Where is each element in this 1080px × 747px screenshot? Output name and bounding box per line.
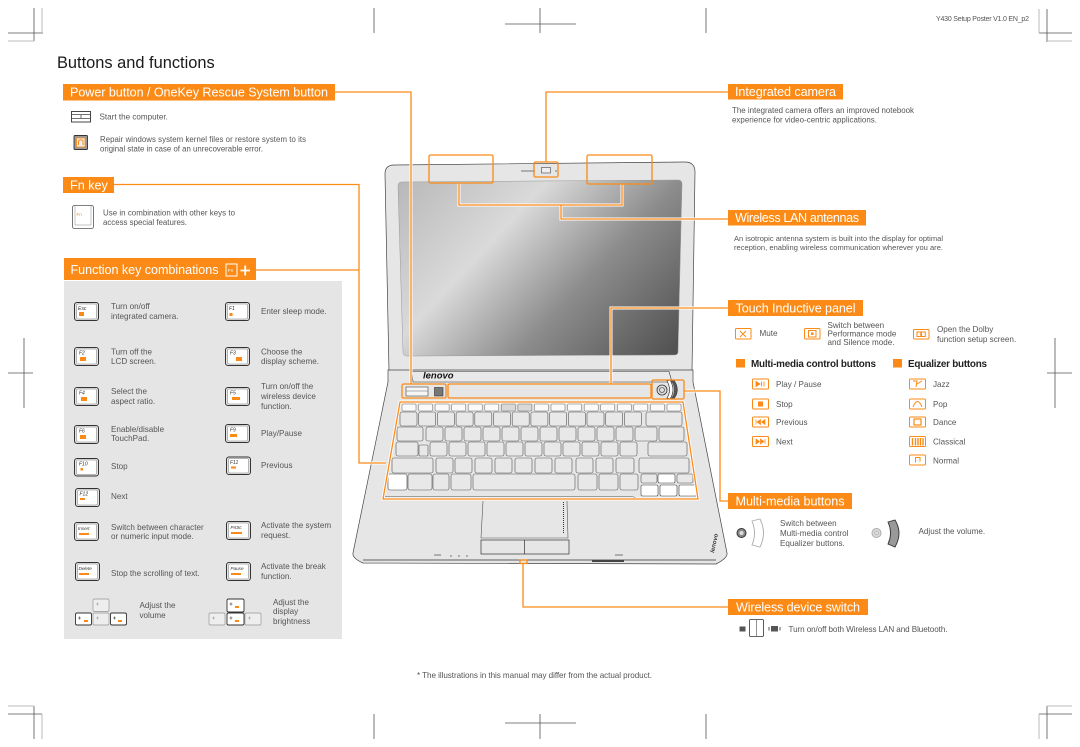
f2 key: LCD screen.	[111, 357, 156, 366]
integrated camera description	[732, 106, 914, 124]
equalizer buttons list	[893, 359, 988, 466]
brightness arrow keys: brightness	[273, 617, 310, 626]
classical: Classical	[933, 438, 966, 446]
next	[752, 436, 793, 446]
footnote: * The illustrations in this manual may differ from the actual product.	[417, 671, 652, 680]
f2 key: F2	[79, 350, 85, 356]
function key row	[402, 404, 681, 411]
stop	[752, 399, 793, 409]
icon: mute	[736, 328, 751, 339]
prtsc key: Activate the system	[261, 521, 331, 530]
bullet	[736, 359, 745, 368]
performance mode item: and Silence mode.	[828, 338, 895, 347]
pause key: function.	[261, 572, 292, 581]
performance mode item	[804, 321, 897, 347]
icon: power button	[72, 112, 90, 122]
camera lens and status lights	[521, 168, 557, 173]
power button description: Start the computer.	[100, 112, 168, 122]
mute item: Mute	[760, 329, 778, 338]
f1 key	[226, 302, 327, 320]
icon: performance mode	[804, 328, 820, 339]
f11 key	[226, 457, 292, 474]
f11 key: Previous	[261, 461, 292, 470]
delete key: Stop the scrolling of text.	[111, 569, 200, 578]
f2 key: Turn off the	[111, 348, 152, 356]
f4 key: F4	[79, 390, 85, 396]
f6 key: F6	[79, 428, 85, 434]
icon: on state	[769, 626, 780, 632]
icon: switch	[750, 620, 764, 636]
onekey button	[434, 388, 443, 396]
f3 key: Choose the	[261, 348, 303, 356]
wireless lan antennas description: An isotropic antenna system is built into the display for optimal	[734, 234, 943, 243]
power button	[406, 387, 428, 396]
front edge and ports: lenovo	[710, 533, 720, 553]
laptop illustration	[353, 162, 727, 564]
multi-media switch item	[737, 519, 849, 548]
delete key: Delete	[78, 566, 92, 571]
performance mode item: Performance mode	[828, 330, 897, 338]
bullet	[893, 359, 902, 368]
multi-media control buttons list: Multi-media control buttons	[751, 359, 876, 370]
previous	[752, 417, 808, 427]
previous: Previous	[776, 418, 808, 427]
prtsc key: request.	[261, 531, 290, 540]
brightness arrow keys: display	[273, 607, 299, 616]
fn key description: access special features.	[103, 218, 187, 227]
icon: volume wheel	[872, 520, 899, 547]
multi-media control buttons list	[736, 359, 876, 446]
multi-media switch item: Multi-media control	[780, 529, 849, 538]
volume arrow keys: volume	[140, 611, 166, 620]
laptop lid	[385, 162, 695, 372]
insert key: or numeric input mode.	[111, 532, 194, 541]
icon: fn key: Fn	[76, 212, 82, 217]
dance: Dance	[933, 418, 957, 427]
f10 key: F10	[79, 462, 88, 468]
integrated camera description: The integrated camera offers an improved notebook	[732, 106, 914, 115]
f9 key	[226, 424, 302, 442]
multi-media switch item: Switch between	[780, 519, 837, 528]
f1 key: F1	[229, 306, 235, 312]
brightness arrow keys	[209, 598, 310, 626]
f10 key: Stop	[111, 462, 128, 471]
insert key	[74, 522, 204, 541]
f9 key: F9	[230, 428, 236, 434]
f2 key	[74, 348, 156, 366]
pause key	[226, 562, 327, 581]
keyboard tray edge	[385, 496, 637, 499]
wireless switch item	[740, 620, 948, 636]
icon: off state	[740, 626, 746, 632]
equalizer buttons list: Equalizer buttons	[908, 359, 988, 370]
heading: function key combinations	[64, 258, 256, 280]
delete key	[76, 562, 200, 580]
f12 key	[76, 488, 128, 506]
wireless switch item: Turn on/off both Wireless LAN and Bluetooth.	[788, 625, 948, 634]
heading: multi-media buttons: Multi-media buttons	[736, 494, 844, 508]
f9 key: Play/Pause	[261, 429, 302, 438]
heading: wireless lan antennas: Wireless LAN antennas	[735, 211, 859, 225]
volume wheel item	[872, 520, 985, 547]
fn key description: Use in combination with other keys to	[103, 208, 236, 218]
icon: fn key and plus	[226, 264, 250, 276]
wireless lan antennas description: reception, enabling wireless communication wherever you are.	[734, 243, 943, 252]
insert key: Insert	[78, 526, 90, 531]
multi-media wheel	[657, 380, 678, 399]
icon: mode wheel	[737, 519, 764, 547]
callout outlines on laptop	[383, 155, 698, 564]
keyboard	[385, 404, 697, 499]
f11 key: F11	[230, 460, 238, 466]
fn and arrow keys	[388, 474, 697, 496]
pop: Pop	[933, 400, 948, 409]
multi-media switch item: Equalizer buttons.	[780, 539, 845, 548]
heading: function key combinations: Function key combinations	[70, 263, 218, 277]
title: Buttons and functions	[57, 54, 215, 72]
hinge	[412, 372, 672, 382]
callout connector lines	[114, 92, 728, 607]
dolby item: Open the Dolby	[937, 325, 994, 334]
f5 key: Turn on/off the	[261, 382, 314, 391]
jazz: Jazz	[933, 380, 950, 389]
insert key: Switch between character	[111, 523, 204, 532]
f5 key: F5	[230, 390, 236, 396]
fn key description	[72, 206, 236, 228]
f4 key	[74, 387, 155, 406]
panel: function key combinations	[64, 281, 342, 639]
esc key: Turn on/off	[111, 302, 150, 311]
esc key: integrated camera.	[111, 312, 178, 321]
heading: power button: Power button / OneKey Rescue System button	[70, 86, 328, 100]
heading: wireless device switch: Wireless device switch	[736, 600, 860, 614]
lenovo logo: lenovo	[423, 370, 454, 382]
icon: onekey rescue button	[74, 136, 88, 150]
f4 key: aspect ratio.	[111, 397, 155, 406]
normal: Normal	[933, 456, 959, 466]
performance mode item: Switch between	[828, 321, 884, 330]
pause key: Pause	[230, 566, 244, 571]
stop: Stop	[776, 400, 793, 409]
play pause: Play / Pause	[776, 380, 822, 389]
f6 key: Enable/disable	[111, 425, 165, 434]
mute item	[736, 328, 778, 339]
esc key: Esc	[78, 306, 87, 312]
play pause	[752, 379, 822, 389]
dolby item	[914, 325, 1016, 344]
prtsc key	[226, 521, 331, 540]
f6 key: TouchPad.	[111, 434, 149, 443]
laptop base	[353, 370, 727, 564]
f12 key: Next	[111, 492, 128, 501]
f6 key	[74, 425, 165, 444]
next: Next	[776, 438, 793, 446]
letter key rows	[392, 412, 693, 490]
f3 key	[226, 348, 319, 366]
f12 key: F12	[80, 492, 88, 498]
dolby item: function setup screen.	[937, 335, 1016, 344]
wireless lan antennas description	[734, 234, 943, 252]
esc key	[74, 302, 178, 321]
icon: fn key	[72, 206, 94, 228]
onekey rescue description	[74, 135, 306, 154]
pause key: Activate the break	[261, 562, 327, 571]
volume arrow keys	[76, 599, 176, 625]
volume arrow keys: Adjust the	[140, 601, 176, 610]
icon: fn key and plus: Fn	[228, 268, 234, 273]
heading: fn key: Fn key	[70, 178, 108, 192]
heading: fn key	[63, 177, 114, 193]
f3 key: F3	[230, 350, 236, 356]
onekey rescue description: Repair windows system kernel files or restore system to its	[100, 135, 306, 144]
f10 key	[74, 458, 128, 476]
laptop screen	[398, 180, 682, 356]
f5 key: wireless device	[260, 392, 316, 401]
icon: dolby	[914, 330, 929, 339]
volume wheel item: Adjust the volume.	[918, 527, 985, 536]
f1 key: Enter sleep mode.	[261, 307, 327, 316]
f4 key: Select the	[111, 387, 147, 396]
power button description	[72, 112, 168, 122]
f3 key: display scheme.	[261, 357, 319, 366]
heading: integrated camera: Integrated camera	[735, 85, 836, 99]
heading: touch inductive panel: Touch Inductive panel	[736, 302, 856, 316]
f5 key: function.	[261, 402, 292, 411]
touchpad	[481, 501, 569, 554]
page header note: Y430 Setup Poster V1.0 EN_p2	[936, 16, 1029, 23]
brightness arrow keys: Adjust the	[273, 598, 309, 607]
prtsc key: PrtSc	[230, 525, 242, 530]
f5 key	[226, 382, 316, 411]
integrated camera description: experience for video-centric applications.	[732, 116, 877, 124]
onekey rescue description: original state in case of an unrecoverable error.	[100, 144, 263, 154]
